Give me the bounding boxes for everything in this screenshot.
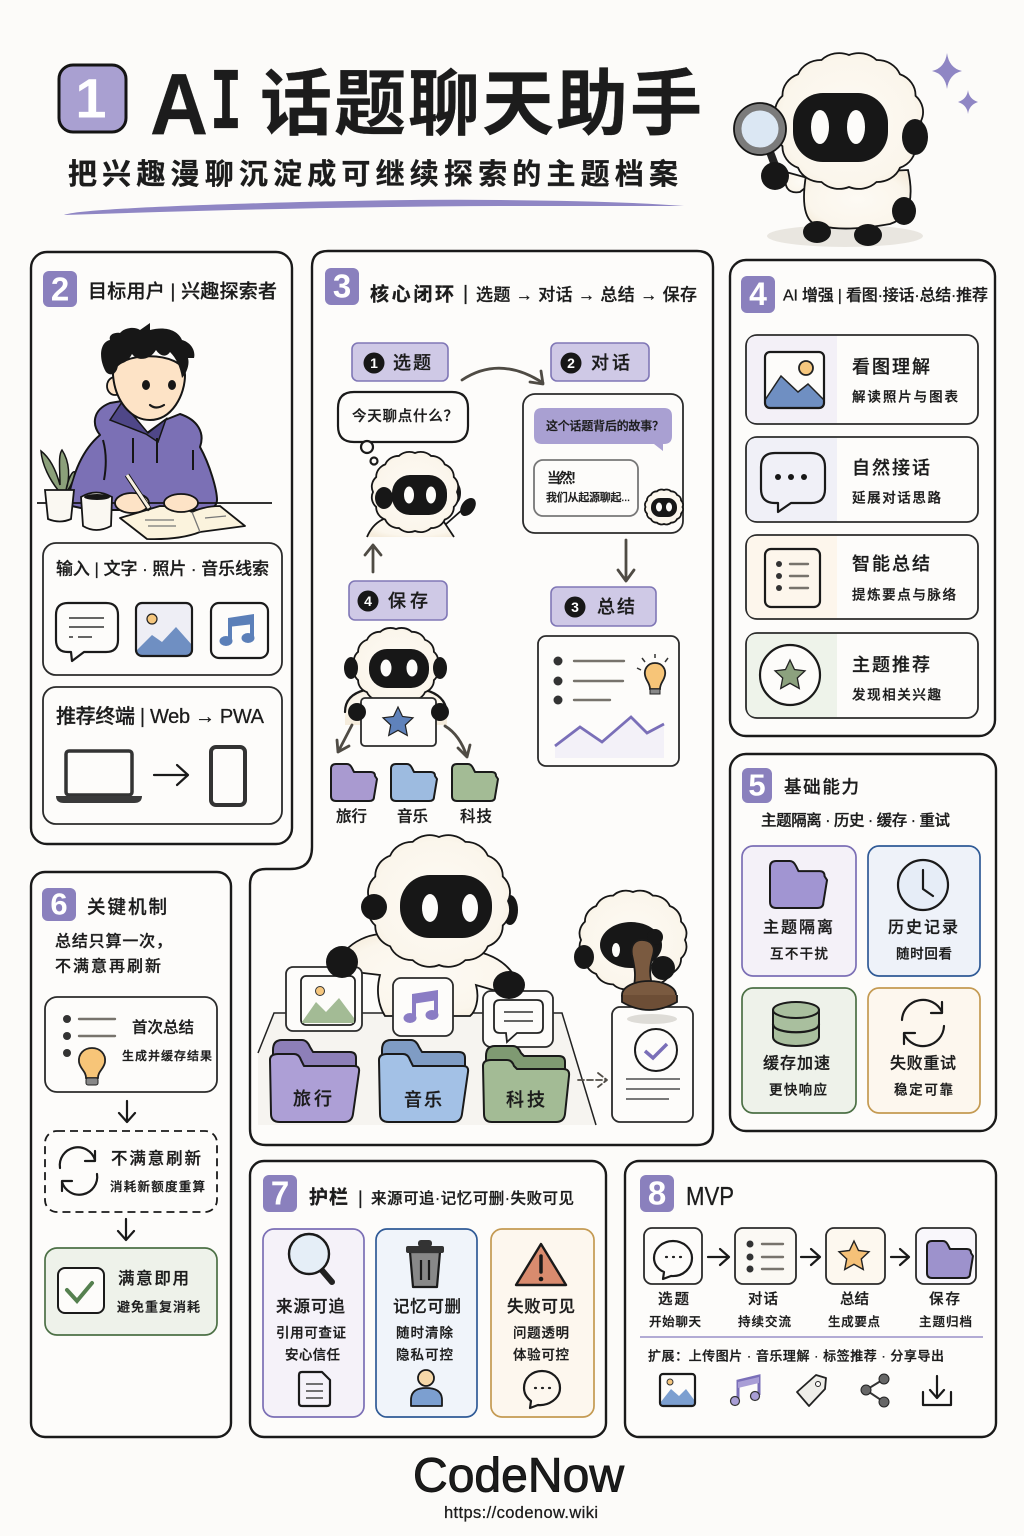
- icon: bulb: [637, 654, 668, 694]
- title block: [59, 55, 702, 215]
- card: traceable source: [263, 1229, 364, 1417]
- step 2 label: 对话: [591, 353, 630, 373]
- folder: tech: [483, 1046, 569, 1122]
- chat card: [523, 394, 683, 533]
- step: select topic: 选题: [658, 1291, 690, 1308]
- heading: [309, 1186, 574, 1208]
- illustration: person at desk: [37, 323, 272, 539]
- heading: [370, 282, 697, 306]
- mascot: waving sheep: [367, 452, 479, 537]
- heading: 核心闭环: [370, 282, 454, 306]
- card: smart summary: 智能总结: [852, 554, 930, 574]
- card: accept: 满意即用: [118, 1269, 189, 1288]
- card: first summary: 首次总结: [132, 1018, 194, 1036]
- step: summarize: 生成要点: [828, 1314, 880, 1329]
- card: cache: 更快响应: [769, 1082, 827, 1098]
- mascot: sheep holding star card: [344, 628, 449, 746]
- card: first summary: [45, 997, 217, 1092]
- card: retry: [868, 988, 980, 1113]
- folder: music: [379, 1040, 468, 1122]
- mascot: sheep with magnifier: [734, 53, 978, 247]
- card: topic recommendation: 主题推荐: [852, 655, 930, 675]
- step: chat: [735, 1228, 796, 1329]
- heading: 目标用户 | 兴趣探索者: [88, 280, 277, 302]
- heading: AI 增强 | 看图·接话·总结·推荐: [783, 286, 988, 304]
- card: accept: 避免重复消耗: [117, 1300, 200, 1314]
- card: traceable source: 引用可查证: [276, 1326, 346, 1340]
- card: image: [286, 967, 362, 1031]
- card: music: [393, 978, 453, 1036]
- description: 总结只算一次，: [55, 932, 172, 950]
- folder: music: 音乐: [404, 1090, 442, 1110]
- card: chat: [483, 991, 553, 1047]
- icon: bulb: [79, 1048, 105, 1085]
- icon: warning: [516, 1244, 566, 1285]
- icon: tag: [797, 1375, 826, 1406]
- card: deletable memory: 隐私可控: [396, 1348, 454, 1362]
- card: input: 输入 | 文字 · 照片 · 音乐线索: [56, 558, 269, 578]
- step 4 label: [349, 581, 447, 620]
- title: 话题聊天助手: [260, 65, 702, 145]
- folder: tech: 科技: [506, 1090, 545, 1110]
- badge 5: [742, 768, 772, 803]
- card: history: 历史记录: [888, 918, 958, 936]
- icon: music: [730, 1376, 760, 1406]
- card: traceable source: 安心信任: [285, 1348, 340, 1362]
- step: chat: 对话: [748, 1291, 778, 1308]
- card: history: [868, 846, 980, 976]
- url: https://codenow.wiki: [444, 1504, 598, 1522]
- extensions text: 扩展：上传图片 · 音乐理解 · 标签推荐 · 分享导出: [648, 1348, 944, 1364]
- badge 6: 6: [50, 886, 68, 922]
- icon: retry: [60, 1147, 97, 1195]
- card: refresh: [45, 1131, 217, 1212]
- panel 6: key mechanism: [31, 872, 231, 1437]
- panel 4: AI enhancement: [730, 260, 995, 736]
- icon: phone: [211, 747, 245, 805]
- step: save: 主题归档: [919, 1314, 972, 1329]
- card: visible failure: 失败可见: [507, 1297, 575, 1316]
- step 1 label: 选题: [393, 353, 431, 373]
- description: 不满意再刷新: [55, 956, 161, 976]
- arrow: step 1 to step 2: [462, 368, 543, 384]
- badge 4: 4: [749, 276, 767, 312]
- heading: MVP: [686, 1181, 734, 1211]
- icon: check: [58, 1268, 104, 1313]
- title underline: [64, 200, 684, 215]
- icon: list: [765, 549, 820, 607]
- icon: database: [773, 1002, 819, 1046]
- step: chat: 持续交流: [738, 1314, 791, 1329]
- step: save: 保存: [929, 1291, 960, 1308]
- folder: travel: [270, 1040, 359, 1122]
- icon: person: [411, 1370, 442, 1406]
- badge 2: [43, 270, 77, 308]
- card: retry: 失败重试: [890, 1054, 956, 1072]
- card: deletable memory: [376, 1229, 477, 1417]
- card: deletable memory: 随时清除: [396, 1324, 454, 1340]
- card: image understanding: 看图理解: [852, 357, 930, 377]
- folders with labels: [331, 764, 498, 826]
- icon: bubble: [524, 1371, 560, 1408]
- card: topic isolation: 主题隔离: [763, 918, 833, 936]
- badge 7: [263, 1174, 297, 1212]
- step: select topic: [644, 1228, 702, 1329]
- icon: clock: [898, 860, 948, 910]
- panel 3: core loop: [250, 251, 713, 1145]
- step 1 label: 1: [370, 355, 378, 371]
- badge 1: 1: [75, 66, 107, 130]
- card: accept: [45, 1248, 217, 1335]
- heading: 来源可追·记忆可删·失败可见: [371, 1190, 574, 1208]
- badge 5: 5: [748, 768, 766, 802]
- divider: [640, 1336, 983, 1338]
- scene: table, mascot, folders: [258, 835, 693, 1125]
- step 3 label: 总结: [597, 597, 635, 617]
- badge 7: 7: [271, 1174, 289, 1212]
- panel 7: guardrails: [250, 1161, 606, 1437]
- card: topic recommendation: 发现相关兴趣: [852, 688, 942, 702]
- card: platform: 推荐终端 | Web → PWA: [56, 705, 265, 728]
- card: smart summary: 提炼要点与脉络: [852, 586, 956, 602]
- title: [150, 55, 702, 155]
- step 2 label: [551, 343, 649, 381]
- card: smart summary: [746, 535, 978, 619]
- heading: 护栏: [309, 1186, 348, 1208]
- thought bubble: [338, 392, 468, 464]
- badge 3: [325, 268, 359, 305]
- arrow: [801, 1249, 820, 1265]
- heading: |: [358, 1188, 363, 1208]
- icon: download: [923, 1376, 951, 1405]
- dashed arrow: [578, 1073, 607, 1087]
- badge 3: 3: [333, 268, 351, 304]
- subtitle: 把兴趣漫聊沉淀成可继续探索的主题档案: [68, 158, 678, 191]
- step 3 label: 3: [571, 599, 579, 615]
- chat card: 我们从起源聊起...: [546, 490, 630, 504]
- icon: photo: [765, 352, 824, 408]
- badge 4: [741, 276, 775, 313]
- folders with labels: 音乐: [397, 806, 428, 826]
- icon: trash: [406, 1240, 444, 1287]
- step 3 label: [551, 587, 656, 626]
- card: deletable memory: 记忆可删: [393, 1297, 461, 1316]
- step 4 label: 保存: [388, 591, 428, 611]
- card: natural chat: 自然接话: [852, 457, 930, 478]
- icon: photo: [136, 603, 192, 656]
- step 2 label: 2: [567, 355, 575, 371]
- arrow: step 4 to step 1: [365, 545, 381, 572]
- title: I: [210, 55, 242, 155]
- step: select topic: 开始聊天: [649, 1315, 701, 1329]
- arrow: step 2 to step 3: [618, 540, 634, 581]
- card: visible failure: [491, 1229, 594, 1417]
- logo wordmark: CodeNow: [413, 1450, 624, 1502]
- badge 1: [59, 65, 126, 132]
- summary card: [538, 636, 679, 766]
- icon: bubble: [761, 453, 825, 512]
- icon: image: [660, 1374, 695, 1406]
- card: traceable source: 来源可追: [276, 1297, 346, 1316]
- icon: magnifier: [289, 1234, 332, 1282]
- mascot: large sheep: [335, 835, 520, 1016]
- folders with labels: 科技: [460, 808, 492, 826]
- extension icons: [660, 1374, 951, 1407]
- badge 8: 8: [648, 1174, 666, 1212]
- icon: text bubble: [56, 603, 118, 661]
- badge 2: 2: [51, 270, 69, 308]
- heading: 关键机制: [87, 896, 167, 918]
- card: image understanding: 解读照片与图表: [852, 388, 958, 404]
- card: history: 随时回看: [896, 946, 952, 962]
- card: refresh: 消耗新额度重算: [110, 1179, 205, 1194]
- card: natural chat: 延展对话思路: [852, 490, 942, 506]
- chat card: 当然！: [547, 470, 584, 486]
- card: topic recommendation: [746, 633, 978, 718]
- chat card: 这个话题背后的故事？: [546, 418, 664, 433]
- card: cache: [742, 988, 856, 1113]
- panel 2: target user: [31, 252, 292, 844]
- card: visible failure: 问题透明: [513, 1326, 569, 1340]
- step 4 label: 4: [364, 593, 372, 609]
- card: topic isolation: [742, 846, 856, 976]
- mini sheep: [645, 490, 683, 524]
- badge 6: [42, 886, 76, 922]
- title: A: [150, 56, 208, 154]
- icon: share: [861, 1374, 889, 1407]
- panel 5: foundations: [730, 754, 996, 1131]
- icon: document: [299, 1372, 330, 1406]
- folders with labels: 旅行: [336, 808, 367, 826]
- card: first summary: 生成并缓存结果: [122, 1048, 212, 1063]
- arrow: [119, 1101, 135, 1122]
- heading: |: [463, 283, 468, 305]
- icon: retry: [902, 1000, 944, 1046]
- step 1 label: [352, 343, 448, 381]
- step: summarize: 总结: [840, 1291, 869, 1308]
- heading: 选题 → 对话 → 总结 → 保存: [476, 286, 697, 304]
- icon: laptop: [56, 751, 142, 803]
- arrow: [118, 1219, 134, 1240]
- card: refresh: 不满意刷新: [111, 1149, 201, 1168]
- stamp: [622, 940, 677, 1010]
- footer brand: [413, 1450, 624, 1522]
- step: summarize: [826, 1228, 885, 1329]
- card: natural chat: [746, 437, 978, 522]
- arrow: [708, 1249, 729, 1265]
- description: [55, 932, 172, 976]
- panel 8: MVP: [625, 1161, 996, 1437]
- badge 8: [640, 1174, 674, 1212]
- arrow: [154, 765, 188, 785]
- icon: star: [760, 645, 820, 705]
- card: platform: [43, 687, 282, 824]
- card: visible failure: 体验可控: [513, 1346, 570, 1362]
- card: cache: 缓存加速: [763, 1054, 830, 1072]
- card: input: [43, 543, 282, 675]
- arrows to folders: [337, 725, 470, 757]
- icon: music: [211, 603, 268, 658]
- thought bubble: 今天聊点什么？: [352, 407, 458, 425]
- table: [258, 1013, 596, 1125]
- card: image understanding: [746, 335, 978, 424]
- document with check: [612, 1007, 693, 1122]
- card: topic isolation: 互不干扰: [770, 946, 828, 962]
- folder: travel: 旅行: [293, 1089, 332, 1109]
- card: retry: 稳定可靠: [894, 1082, 953, 1098]
- sparkles: [932, 53, 978, 114]
- mascot: small sheep with stamp: [574, 891, 686, 1010]
- subheading: 主题隔离 · 历史 · 缓存 · 重试: [761, 812, 950, 830]
- step: save: [916, 1228, 976, 1329]
- arrow: [891, 1249, 909, 1265]
- heading: 基础能力: [784, 777, 859, 797]
